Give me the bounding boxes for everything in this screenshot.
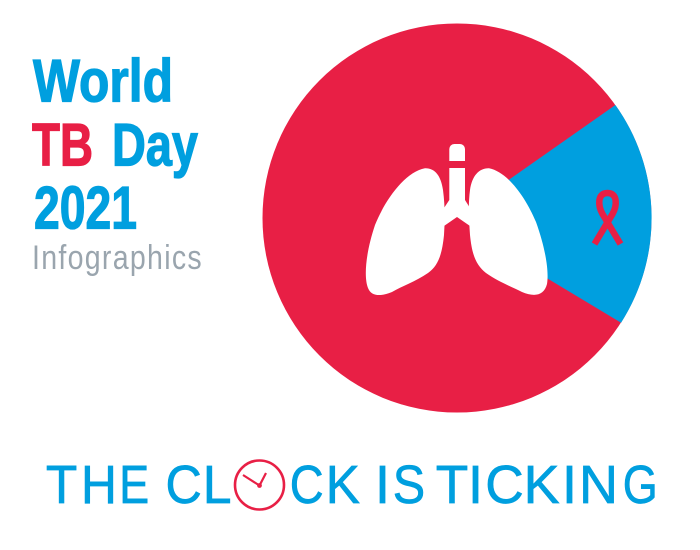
pie slice: TB xyxy=(262,24,652,412)
title: World xyxy=(33,48,173,114)
icon: clock xyxy=(235,460,284,510)
title: TB xyxy=(32,112,93,178)
tagline xyxy=(46,455,658,515)
tagline: L xyxy=(203,455,232,515)
title: 2021 xyxy=(34,174,137,242)
tagline: C xyxy=(485,455,524,515)
tagline: S xyxy=(393,455,425,515)
tagline: K xyxy=(524,455,560,515)
subtitle: Infographics xyxy=(32,239,202,277)
pie slice: HIV xyxy=(500,105,652,323)
tagline: E xyxy=(119,455,149,515)
tagline: I xyxy=(562,455,577,515)
tagline: C xyxy=(290,455,324,515)
title: Day xyxy=(112,112,198,178)
tagline: T xyxy=(46,455,77,515)
tagline: N xyxy=(579,455,618,515)
tagline: T xyxy=(436,455,468,515)
tagline: G xyxy=(623,455,658,515)
tagline: C xyxy=(166,455,202,515)
title xyxy=(32,48,198,242)
tagline: I xyxy=(375,455,390,515)
tagline: H xyxy=(81,455,117,515)
pie chart xyxy=(262,24,652,412)
tagline: I xyxy=(468,455,483,515)
tagline: K xyxy=(326,455,360,515)
icon: lungs xyxy=(366,144,548,295)
icon: red ribbon xyxy=(594,193,620,244)
